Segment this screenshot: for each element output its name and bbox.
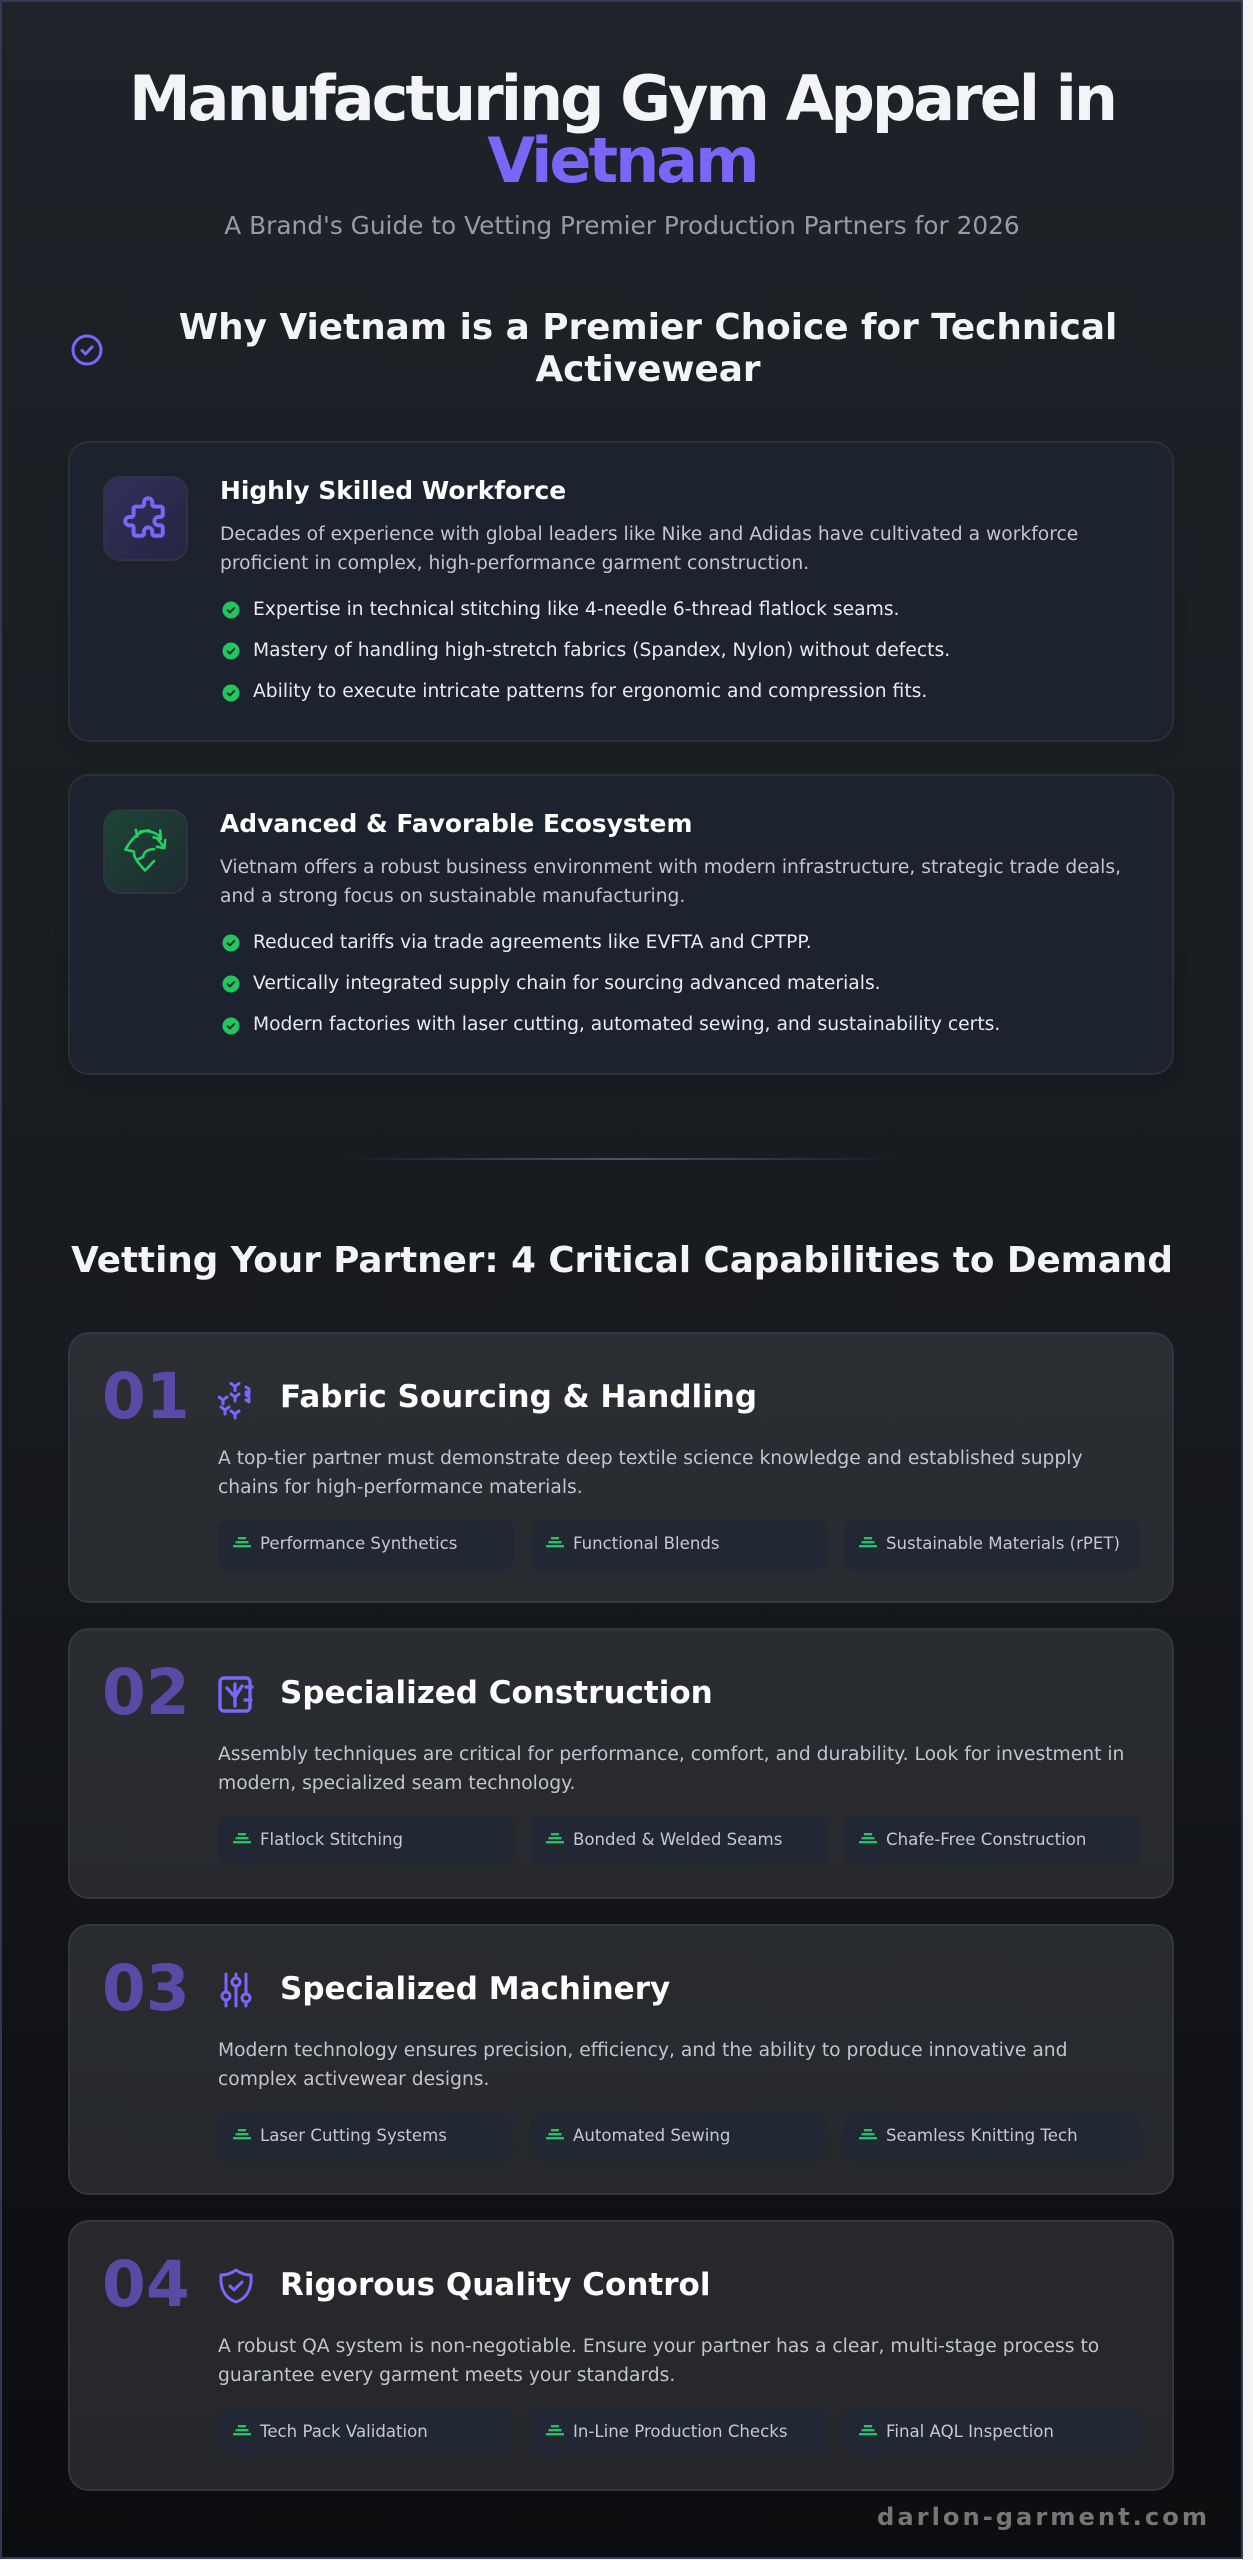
chip: In-Line Production Checks <box>573 2422 788 2441</box>
capability description: chains for high-performance materials. <box>218 1477 583 1498</box>
capability title: Specialized Construction <box>280 1675 713 1711</box>
chip: Bonded & Welded Seams <box>573 1830 782 1849</box>
chip: Chafe-Free Construction <box>886 1830 1086 1849</box>
capability title: Fabric Sourcing & Handling <box>280 1379 757 1415</box>
number: 02 <box>102 1656 190 1729</box>
card description <box>220 524 1078 574</box>
capability description: Assembly techniques are critical for performance, comfort, and durability. Look for investment in <box>218 1744 1124 1765</box>
bullet list: Reduced tariffs via trade agreements like EVFTA and CPTPP. <box>253 932 812 953</box>
icon: seam square <box>218 1676 254 1713</box>
icon: shield check <box>219 2268 253 2304</box>
capability description: A robust QA system is non-negotiable. Ensure your partner has a clear, multi-stage process to <box>218 2336 1099 2357</box>
chip <box>218 1520 514 1570</box>
chip <box>844 1520 1140 1570</box>
panel: capability 02 <box>68 1628 1174 1899</box>
chip <box>844 2112 1140 2162</box>
title <box>129 62 1115 197</box>
bullet list: Ability to execute intricate patterns for ergonomic and compression fits. <box>253 681 927 702</box>
capability title: Specialized Machinery <box>280 1971 670 2007</box>
capability description: modern, specialized seam technology. <box>218 1773 575 1794</box>
chip <box>531 1520 827 1570</box>
section icon: circle check <box>72 334 102 366</box>
number: 01 <box>102 1360 190 1433</box>
capability description <box>218 2336 1099 2386</box>
card description: Decades of experience with global leaders like Nike and Adidas have cultivated a workforce <box>220 524 1078 545</box>
capability description <box>218 1744 1124 1794</box>
bullet list <box>222 932 1000 1035</box>
number: 03 <box>102 1952 190 2025</box>
chip <box>531 2408 827 2458</box>
card description: proficient in complex, high-performance garment construction. <box>220 553 809 574</box>
capability description: Modern technology ensures precision, efficiency, and the ability to produce innovative and <box>218 2040 1068 2061</box>
heading: why Vietnam: Activewear <box>535 349 761 390</box>
footer watermark: darlon-garment.com <box>877 2503 1210 2531</box>
chip <box>531 1816 827 1866</box>
bullet list: Modern factories with laser cutting, automated sewing, and sustainability certs. <box>253 1014 1000 1035</box>
panel: highly skilled workforce <box>68 441 1174 742</box>
chip <box>531 2112 827 2162</box>
icon: sliders <box>220 1972 252 2008</box>
icon: fabric fibers <box>218 1382 250 1420</box>
chip <box>844 1816 1140 1866</box>
chip: Automated Sewing <box>573 2126 730 2145</box>
bullet list <box>222 599 950 702</box>
bullet list: Mastery of handling high-stretch fabrics (Spandex, Nylon) without defects. <box>253 640 950 661</box>
chip: Seamless Knitting Tech <box>886 2126 1078 2145</box>
chip: Final AQL Inspection <box>886 2422 1054 2441</box>
heading: why Vietnam: Why Vietnam is a Premier Choice for Technical <box>179 307 1117 348</box>
number: 04 <box>102 2248 190 2321</box>
title: Manufacturing Gym Apparel in <box>129 62 1115 135</box>
icon: recycle map <box>103 809 188 894</box>
subtitle: A Brand's Guide to Vetting Premier Production Partners for 2026 <box>224 211 1020 240</box>
chip <box>218 1816 514 1866</box>
chip: Performance Synthetics <box>260 1534 457 1553</box>
chip: Laser Cutting Systems <box>260 2126 447 2145</box>
card title: Advanced & Favorable Ecosystem <box>220 809 692 838</box>
chip <box>218 2408 514 2458</box>
card description: and a strong focus on sustainable manufacturing. <box>220 886 685 907</box>
bullet list: Expertise in technical stitching like 4-needle 6-thread flatlock seams. <box>253 599 900 620</box>
title: Vietnam <box>487 124 757 197</box>
capability title: Rigorous Quality Control <box>280 2267 710 2303</box>
heading: vetting your partner: Vetting Your Partner: 4 Critical Capabilities to Demand <box>71 1240 1173 1281</box>
card title: Highly Skilled Workforce <box>220 476 566 505</box>
chip <box>218 2112 514 2162</box>
chip: Tech Pack Validation <box>260 2422 428 2441</box>
chip: Functional Blends <box>573 1534 720 1553</box>
panel: advanced ecosystem <box>68 774 1174 1075</box>
card description: Vietnam offers a robust business environment with modern infrastructure, strategic trade deals, <box>220 857 1121 878</box>
capability description <box>218 2040 1068 2090</box>
chip: Sustainable Materials (rPET) <box>886 1534 1120 1553</box>
panel: capability 04 <box>68 2220 1174 2491</box>
heading: why Vietnam <box>179 307 1117 390</box>
chip <box>844 2408 1140 2458</box>
bullet list: Vertically integrated supply chain for sourcing advanced materials. <box>253 973 881 994</box>
panel: capability 03 <box>68 1924 1174 2195</box>
icon: puzzle <box>103 476 188 561</box>
capability description <box>218 1448 1083 1498</box>
capability description: A top-tier partner must demonstrate deep textile science knowledge and established supply <box>218 1448 1083 1469</box>
card description <box>220 857 1121 907</box>
capability description: guarantee every garment meets your standards. <box>218 2365 675 2386</box>
panel: capability 01 <box>68 1332 1174 1603</box>
capability description: complex activewear designs. <box>218 2069 489 2090</box>
chip: Flatlock Stitching <box>260 1830 403 1849</box>
